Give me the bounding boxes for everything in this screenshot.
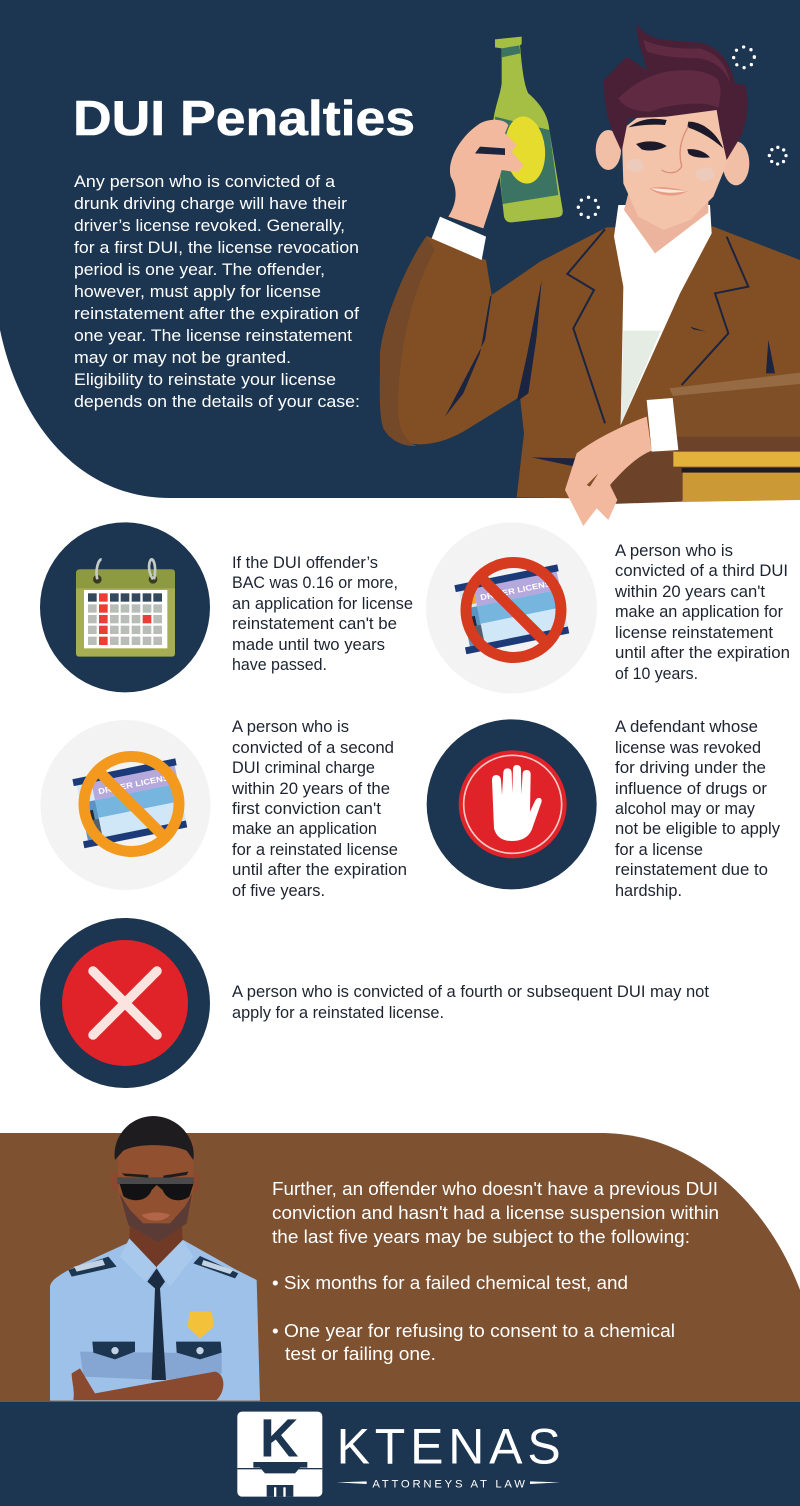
eyebrows <box>122 1172 188 1178</box>
hand with bottle <box>448 120 523 228</box>
uniform shirt <box>50 1240 260 1401</box>
text: second DUI: make an application <box>232 820 377 838</box>
intro text block: Eligibility to reinstate your license <box>74 370 336 389</box>
lower hand <box>565 417 652 526</box>
hair <box>604 24 748 160</box>
crossed arm <box>72 1368 223 1400</box>
hair highlight <box>618 70 720 112</box>
text: further penalties: test or failing one. <box>285 1343 436 1364</box>
collar <box>120 1238 193 1287</box>
lapels <box>567 229 748 423</box>
text: BAC: If the DUI offender’s <box>232 554 378 572</box>
intro text block: reinstatement after the expiration of <box>74 304 359 323</box>
tie <box>147 1268 166 1380</box>
sparkles <box>578 47 786 217</box>
intro text block: depends on the details of your case: <box>74 392 360 411</box>
text: fourth DUI: A person who is convicted of a fourth or subsequent DUI may not <box>232 983 709 1001</box>
text: third DUI: license reinstatement <box>615 624 773 642</box>
text: BAC <box>232 554 413 674</box>
raised cuff <box>432 217 486 260</box>
pocket flaps <box>92 1342 222 1359</box>
text: second DUI: A person who is <box>232 718 349 736</box>
text: second DUI: DUI criminal charge <box>232 759 375 777</box>
text: BAC: reinstatement can't be <box>232 615 397 633</box>
text: hardship: for driving under the <box>615 759 766 777</box>
text: BAC: BAC was 0.16 or more, <box>232 574 398 592</box>
text: hardship: license was revoked <box>615 739 761 757</box>
text: second DUI: first conviction can't <box>232 800 381 818</box>
logo <box>237 1410 561 1497</box>
face <box>622 103 728 230</box>
text: third DUI: within 20 years can't <box>614 583 765 601</box>
mouth <box>142 1212 170 1221</box>
tagline: ATTORNEYS AT LAW <box>372 1478 525 1490</box>
intro text block: for a first DUI, the license revocation <box>74 238 359 257</box>
epaulets <box>68 1257 117 1277</box>
intro text block: period is one year. The offender, <box>74 260 325 279</box>
text: fourth DUI: apply for a reinstated license. <box>232 1004 444 1022</box>
logo desk <box>253 1462 307 1473</box>
text: second DUI <box>231 718 407 900</box>
text: further penalties: Further, an offender who doesn't have a previous DUI <box>272 1178 718 1199</box>
icon: red X <box>40 918 210 1088</box>
icon: stop hand <box>427 719 597 889</box>
icon: orange crossed-out license <box>40 720 210 890</box>
text: third DUI: make an application for <box>615 603 784 621</box>
text: hardship: alcohol may or may <box>615 800 756 818</box>
text: third DUI: A person who is <box>615 542 733 560</box>
text: second DUI: within 20 years of the <box>231 780 390 798</box>
text: second DUI: of five years. <box>232 882 325 900</box>
panel: footer <box>0 1402 800 1506</box>
illustration: man holding bottle <box>380 24 800 526</box>
cuff <box>647 398 678 452</box>
illustration: police officer <box>50 1116 260 1401</box>
eyes <box>636 141 710 158</box>
beard <box>119 1193 192 1243</box>
text: BAC: made until two years <box>232 636 385 654</box>
intro text block: may or may not be granted. <box>74 348 291 367</box>
text: further penalties <box>272 1178 719 1364</box>
icon: red crossed-out license <box>426 522 597 694</box>
text: second DUI: convicted of a second <box>232 739 394 757</box>
bullet: one year: • One year for refusing to consent to a chemical <box>272 1320 675 1341</box>
text: further penalties: the last five years may be subject to the following: <box>272 1226 690 1247</box>
intro text block: Any person who is convicted of a <box>74 172 336 191</box>
bottle label <box>502 115 548 185</box>
shirt lower shade <box>621 331 661 425</box>
wordmark: KTENAS <box>337 1418 561 1474</box>
text: hardship: reinstatement due to <box>615 861 768 879</box>
logo K: K <box>260 1410 299 1469</box>
text: third DUI <box>614 542 790 683</box>
text: third DUI: of 10 years. <box>615 665 698 683</box>
icon: calendar <box>40 522 210 692</box>
sunglasses <box>117 1178 193 1200</box>
intro text block: one year. The license reinstatement <box>74 326 352 345</box>
text: hardship: A defendant whose <box>615 718 758 736</box>
icon: orange crossed-out license: DRIVER LICENSE <box>98 772 176 796</box>
text: hardship: hardship. <box>615 882 682 900</box>
face <box>117 1142 193 1243</box>
cheeks <box>626 159 644 172</box>
text: third DUI: convicted of a third DUI <box>615 562 788 580</box>
neck <box>624 193 708 253</box>
text: BAC: an application for license <box>232 595 413 613</box>
text: BAC: have passed. <box>232 656 327 674</box>
text: hardship: not be eligible to apply <box>615 820 781 838</box>
panel: header background <box>0 0 800 500</box>
sleeve shade <box>380 236 435 446</box>
icon: red crossed-out license: DRIVER LICENSE <box>480 578 558 602</box>
bullet: six months: • Six months for a failed chemical test, and <box>272 1272 628 1293</box>
text: further penalties: conviction and hasn't had a license suspension within <box>272 1202 719 1223</box>
panel: brown section <box>0 1133 800 1402</box>
text: second DUI: until after the expiration <box>232 861 407 879</box>
badge <box>187 1312 214 1338</box>
bottle <box>493 37 563 222</box>
shirt shade <box>80 1352 222 1380</box>
eyebrows <box>628 119 723 148</box>
bottle dark band <box>495 117 558 204</box>
text: fourth DUI <box>232 983 709 1022</box>
intro text block <box>74 172 360 411</box>
title: DUI Penalties <box>73 92 415 146</box>
text: hardship <box>615 718 781 900</box>
books and table <box>669 373 800 397</box>
text: hardship: for a license <box>615 841 703 859</box>
mouth <box>649 187 688 196</box>
logo badge <box>237 1412 322 1497</box>
ears <box>596 130 621 170</box>
text: hardship: influence of drugs or <box>615 780 768 798</box>
shirt <box>614 205 712 425</box>
ears <box>111 1172 119 1192</box>
neck <box>129 1220 183 1267</box>
intro text block: however, must apply for license <box>74 282 321 301</box>
nose <box>662 127 688 173</box>
hair <box>115 1116 194 1160</box>
text: second DUI: for a reinstated license <box>232 841 398 859</box>
text: third DUI: until after the expiration <box>615 644 790 662</box>
jacket <box>380 227 800 500</box>
intro text block: drunk driving charge will have their <box>74 194 347 213</box>
intro text block: driver’s license revoked. Generally, <box>74 216 345 235</box>
jacket shadows <box>445 280 775 467</box>
